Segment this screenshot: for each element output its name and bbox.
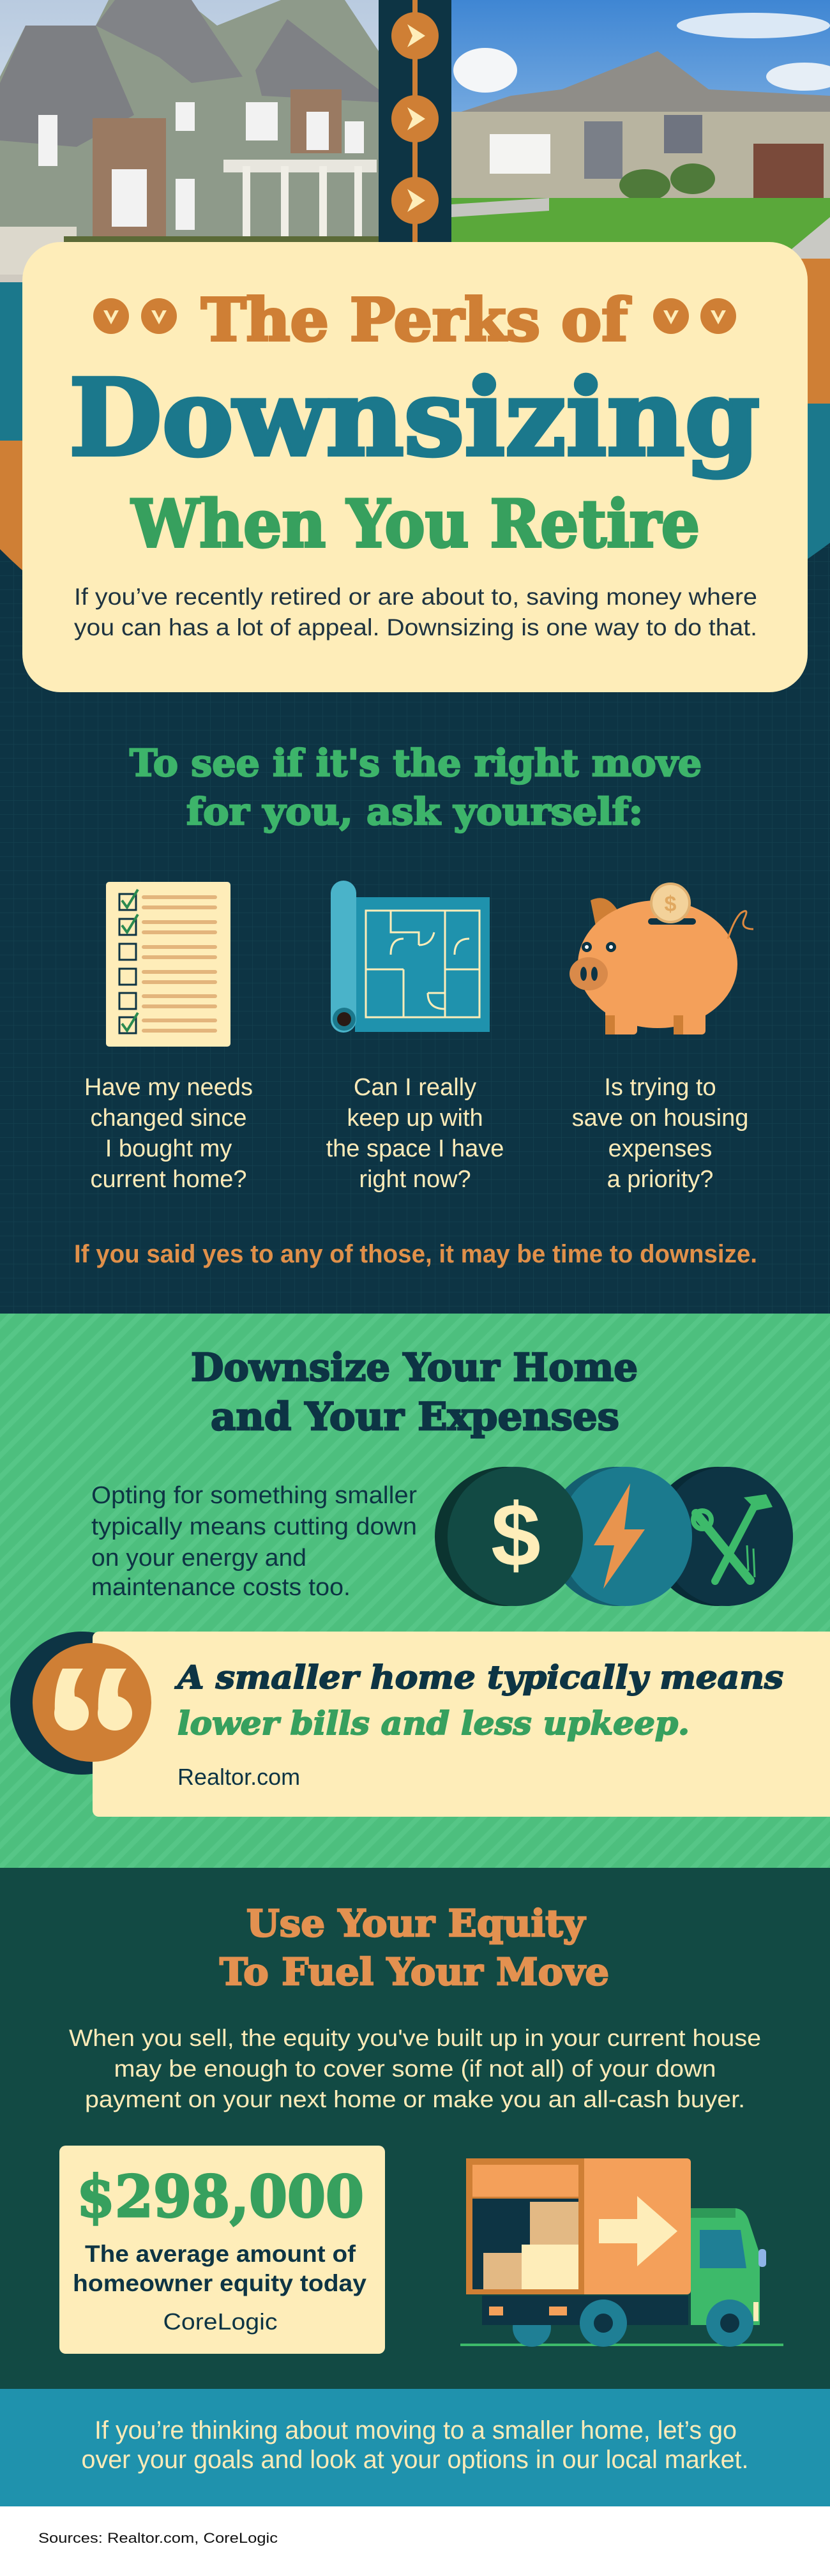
section background: dark green — [0, 1868, 830, 2389]
stat box: average equity: The average amount of — [85, 2241, 356, 2267]
title line: Downsizing: Downsizing — [69, 356, 760, 480]
paragraph: energy and maintenance: Opting for something smaller — [91, 1482, 417, 1509]
icon: moving truck — [460, 2158, 783, 2347]
question 1: Have my needs — [84, 1074, 253, 1101]
arrow strip with three chevron circles — [379, 0, 451, 242]
heading: downsize your home: and Your Expenses — [211, 1395, 619, 1439]
icon: piggy bank — [570, 884, 753, 1034]
conclusion line: If you said yes to any of those, it may be time to downsize. — [74, 1240, 757, 1268]
icon: checklist — [106, 882, 230, 1047]
background: dark navy grid — [0, 236, 830, 1315]
stat box: average equity: CoreLogic — [163, 2308, 277, 2335]
icon: chevron circles left — [93, 298, 177, 334]
quote text: A smaller home typically means — [175, 1658, 783, 1696]
paragraph: energy and maintenance — [91, 1482, 417, 1601]
paragraph: energy and maintenance: typically means cutting down — [91, 1513, 417, 1540]
quote text: lower bills and less upkeep. — [177, 1704, 690, 1742]
heading: downsize your home: Downsize Your Home — [191, 1345, 638, 1390]
sources footer: Sources: Realtor.com, CoreLogic — [38, 2530, 278, 2546]
question 3: save on housing — [572, 1105, 748, 1132]
question texts — [84, 1074, 748, 1193]
question 1: I bought my — [105, 1135, 232, 1162]
paragraph: equity explanation: When you sell, the equity you've built up in your current house — [69, 2025, 761, 2051]
intro paragraph: you can has a lot of appeal. Downsizing is one way to do that. — [74, 614, 757, 640]
icon: dollar coin — [435, 1467, 583, 1606]
question 3: a priority? — [607, 1166, 713, 1193]
paragraph: energy and maintenance: on your energy and — [91, 1545, 306, 1572]
stat box: average equity: $298,000 — [77, 2163, 364, 2231]
quote callout — [10, 1632, 830, 1817]
question 1 — [84, 1074, 253, 1193]
heading: use your equity — [220, 1902, 609, 1994]
paragraph: equity explanation — [69, 2025, 761, 2112]
paragraph: equity explanation: may be enough to cover some (if not all) of your down — [114, 2056, 716, 2082]
question 2: the space I have — [326, 1135, 504, 1162]
question 3: Is trying to — [604, 1074, 716, 1101]
question 1: changed since — [90, 1105, 247, 1132]
sources footer — [0, 2506, 830, 2576]
stat box: average equity: homeowner equity today — [73, 2270, 366, 2296]
icon: lightning coin — [547, 1467, 692, 1606]
heading: ask yourself — [130, 741, 702, 833]
title line: When You Retire: When You Retire — [131, 486, 700, 563]
closing call-to-action bar — [0, 2389, 830, 2506]
heading: ask yourself: To see if it's the right move — [130, 741, 702, 785]
paragraph: energy and maintenance: maintenance costs too. — [91, 1574, 351, 1601]
icon: piggy bank: $ — [665, 892, 677, 916]
heading: ask yourself: for you, ask yourself: — [186, 790, 643, 833]
heading: downsize your home — [191, 1345, 638, 1439]
icon: dollar coin: $ — [491, 1485, 541, 1585]
closing call-to-action bar: If you’re thinking about moving to a smaller home, let’s go — [94, 2416, 737, 2444]
section background: green stripes — [0, 1314, 830, 1868]
question 2: right now? — [359, 1166, 471, 1193]
question 1: current home? — [90, 1166, 247, 1193]
question 2: keep up with — [347, 1105, 483, 1132]
heading: use your equity: Use Your Equity — [246, 1902, 586, 1945]
title card — [22, 242, 808, 692]
icon: blueprint — [331, 881, 490, 1033]
intro paragraph — [74, 584, 757, 640]
photo: smaller ranch house — [451, 0, 830, 259]
quote source: Realtor.com — [177, 1764, 300, 1790]
title line: The Perks of: The Perks of — [201, 285, 631, 354]
question 2 — [326, 1074, 504, 1193]
icon: chevron circles right — [653, 298, 736, 334]
decorative color blocks behind title card — [0, 259, 830, 594]
photo: large two-story house — [0, 0, 379, 291]
icon: quote mark circle — [33, 1643, 151, 1762]
question 3: expenses — [608, 1135, 712, 1162]
question 3 — [572, 1074, 748, 1193]
intro paragraph: If you’ve recently retired or are about to, saving money where — [74, 584, 757, 610]
icon: tools coin — [648, 1467, 793, 1606]
stat box: average equity — [59, 2146, 385, 2354]
heading: use your equity: To Fuel Your Move — [220, 1950, 609, 1994]
paragraph: equity explanation: payment on your next home or make you an all-cash buyer. — [85, 2086, 745, 2112]
quote text — [175, 1658, 783, 1742]
question 2: Can I really — [354, 1074, 476, 1101]
closing call-to-action bar: over your goals and look at your options in our local market. — [82, 2446, 748, 2474]
